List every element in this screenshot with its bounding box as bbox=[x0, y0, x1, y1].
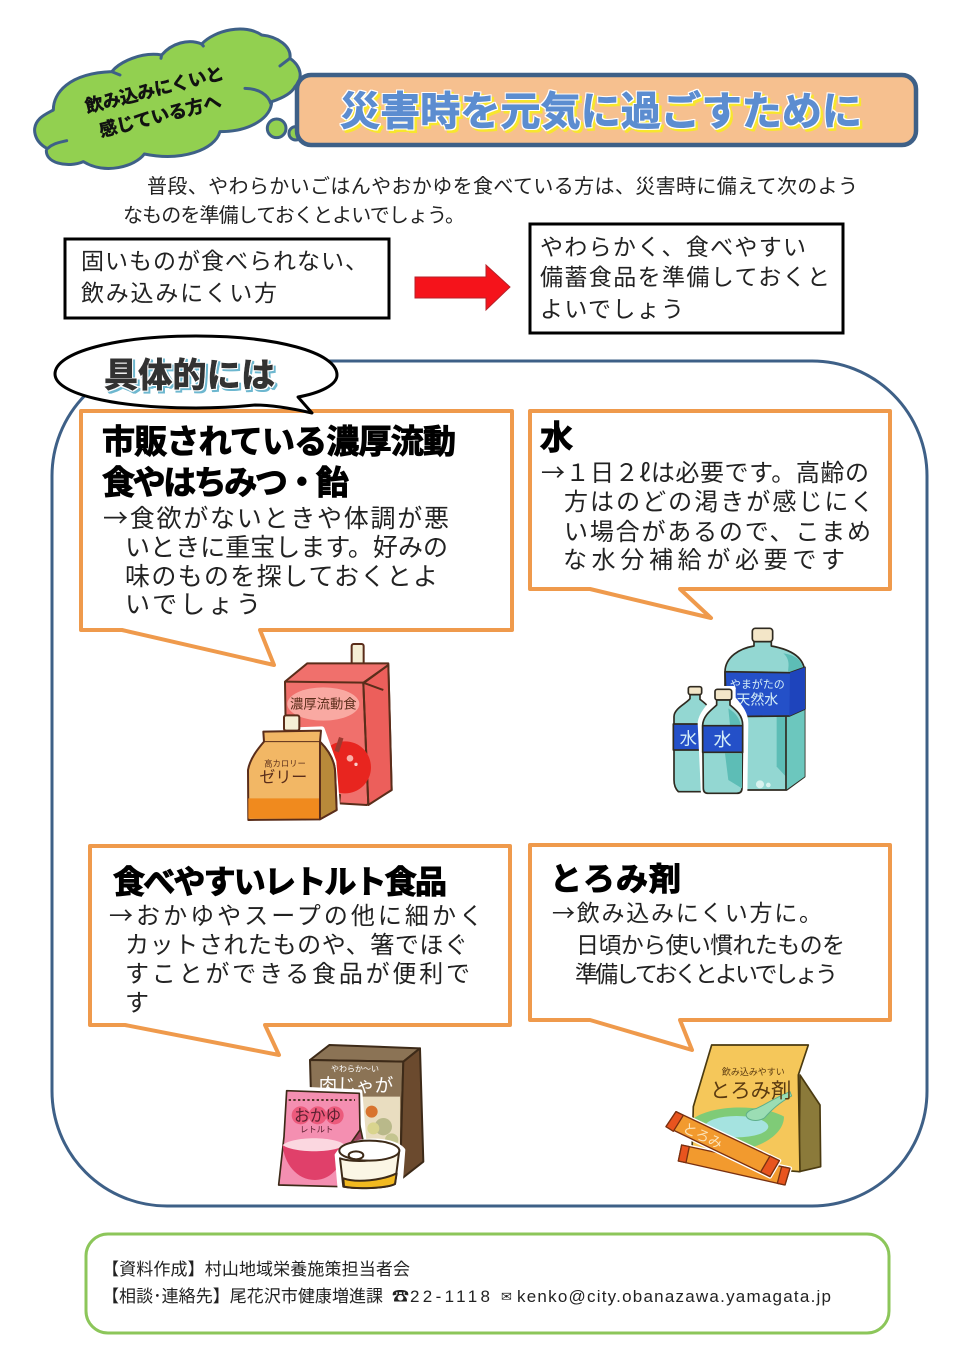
body: 味のものを探しておくとよ bbox=[125, 557, 438, 593]
illustration: liquid food carton and jelly pouch bbox=[248, 644, 392, 821]
body: な水分補給が必要です bbox=[563, 540, 845, 575]
source line: 【資料作成】村山地域栄養施策担当者会 bbox=[102, 1255, 410, 1280]
speech ellipse: specifically bbox=[55, 336, 337, 413]
body: すことができる食品が便利で bbox=[125, 954, 470, 989]
callout: thickener bbox=[530, 845, 890, 1050]
box: people who cannot eat hard foods: 固いものが食べられない、 bbox=[81, 242, 368, 276]
heading bbox=[102, 415, 456, 504]
box: prepare soft foods: よいでしょう bbox=[540, 290, 684, 324]
callout: retort foods bbox=[90, 846, 510, 1055]
intro text: なものを準備しておくとよいでしょう。 bbox=[123, 199, 465, 228]
illustration: retort foods: おかゆ bbox=[294, 1103, 341, 1126]
body: 方はのどの渇きが感じにく bbox=[564, 482, 874, 517]
body: →１日２ℓは必要です。高齢の bbox=[541, 453, 869, 488]
heading: 市販されている濃厚流動 bbox=[102, 415, 456, 463]
heading: 食べやすいレトルト食品 bbox=[113, 857, 447, 903]
callout: thickened liquid foods bbox=[81, 411, 512, 665]
footer contact box bbox=[86, 1234, 889, 1333]
box: prepare soft foods: やわらかく、食べやすい bbox=[540, 228, 806, 262]
contact line: ✉ bbox=[501, 1286, 512, 1305]
illustration: liquid food carton and jelly pouch: 高カロリー bbox=[264, 758, 306, 770]
callout: water bbox=[530, 411, 890, 618]
box: prepare soft foods bbox=[530, 224, 843, 333]
title banner bbox=[297, 75, 916, 145]
contact line: 【相談･連絡先】尾花沢市健康増進課 bbox=[102, 1282, 383, 1307]
body: 準備しておくとよいでしょう bbox=[575, 955, 838, 989]
body: いでしょう bbox=[125, 585, 261, 621]
illustration: water bottles: 水 bbox=[680, 724, 697, 749]
body: 日頃から使い慣れたものを bbox=[576, 926, 845, 960]
bag bbox=[692, 1045, 821, 1172]
illustration: retort foods: 肉じゃが bbox=[319, 1071, 394, 1098]
heading: 水 bbox=[540, 411, 573, 459]
illustration: retort foods: レトルト bbox=[300, 1123, 333, 1135]
cloud text: 感じている方へ bbox=[96, 87, 224, 143]
contact line: ☎ bbox=[392, 1282, 409, 1307]
illustration: liquid food carton and jelly pouch: ゼリー bbox=[259, 764, 307, 788]
illustration: thickener bag and sticks bbox=[666, 1045, 821, 1185]
carton bbox=[285, 644, 392, 805]
cloud text: 飲み込みにくいと bbox=[82, 59, 226, 119]
illustration: water bottles: 天然水 bbox=[736, 690, 778, 710]
illustration: water bottles bbox=[673, 628, 805, 795]
small bottle right bbox=[700, 688, 746, 795]
large bottle bbox=[725, 628, 805, 790]
thought cloud: swallowing difficulty bbox=[35, 29, 302, 168]
large rounded panel bbox=[52, 361, 927, 1206]
box: people who cannot eat hard foods bbox=[65, 239, 389, 318]
illustration: thickener bag and sticks: とろみ剤 bbox=[710, 1073, 791, 1103]
body bbox=[552, 894, 845, 989]
illustration: thickener bag and sticks: 飲み込みやすい bbox=[722, 1065, 785, 1078]
body bbox=[103, 499, 449, 621]
body: →おかゆやスープの他に細かく bbox=[109, 896, 483, 931]
body: →食欲がないときや体調が悪 bbox=[103, 499, 449, 535]
contact line: 22-1118 bbox=[410, 1287, 490, 1306]
body bbox=[109, 896, 483, 1018]
pink pouch bbox=[277, 1088, 364, 1190]
contact line bbox=[102, 1282, 831, 1307]
body: い場合があるので、こまめ bbox=[564, 512, 871, 547]
intro text bbox=[123, 170, 858, 228]
title: 災害時を元気に過ごすために bbox=[340, 79, 862, 137]
cloud shape bbox=[35, 29, 302, 168]
arrow: red right arrow bbox=[415, 265, 510, 310]
illustration: liquid food carton and jelly pouch: 濃厚流動食 bbox=[290, 694, 357, 713]
contact line: kenko@city.obanazawa.yamagata.jp bbox=[517, 1287, 831, 1306]
heading: とろみ剤 bbox=[550, 854, 681, 900]
illustration: retort foods: やわらか〜い bbox=[331, 1064, 379, 1075]
small bottle left bbox=[673, 687, 711, 792]
cup bbox=[337, 1141, 403, 1193]
body: →飲み込みにくい方に。 bbox=[552, 894, 822, 928]
heading: 具体的には bbox=[104, 348, 275, 397]
illustration: thickener bag and sticks: とろみ bbox=[680, 1118, 726, 1154]
body: す bbox=[125, 983, 149, 1018]
jelly pouch bbox=[248, 715, 337, 821]
illustration: water bottles: やまがたの bbox=[730, 676, 785, 692]
boxed nikujaga bbox=[310, 1045, 423, 1180]
heading: 食やはちみつ・飴 bbox=[102, 456, 349, 504]
body: いときに重宝します。好みの bbox=[125, 528, 448, 564]
body bbox=[541, 453, 874, 575]
box: people who cannot eat hard foods: 飲み込みにくい方 bbox=[81, 274, 277, 308]
illustration: water bottles: 水 bbox=[714, 726, 732, 752]
intro text: 普段、やわらかいごはんやおかゆを食べている方は、災害時に備えて次のよう bbox=[147, 170, 858, 199]
box: prepare soft foods: 備蓄食品を準備しておくと bbox=[540, 258, 830, 292]
sticks bbox=[666, 1112, 790, 1185]
body: カットされたものや、箸でほぐ bbox=[125, 925, 468, 960]
illustration: retort foods bbox=[277, 1045, 423, 1193]
